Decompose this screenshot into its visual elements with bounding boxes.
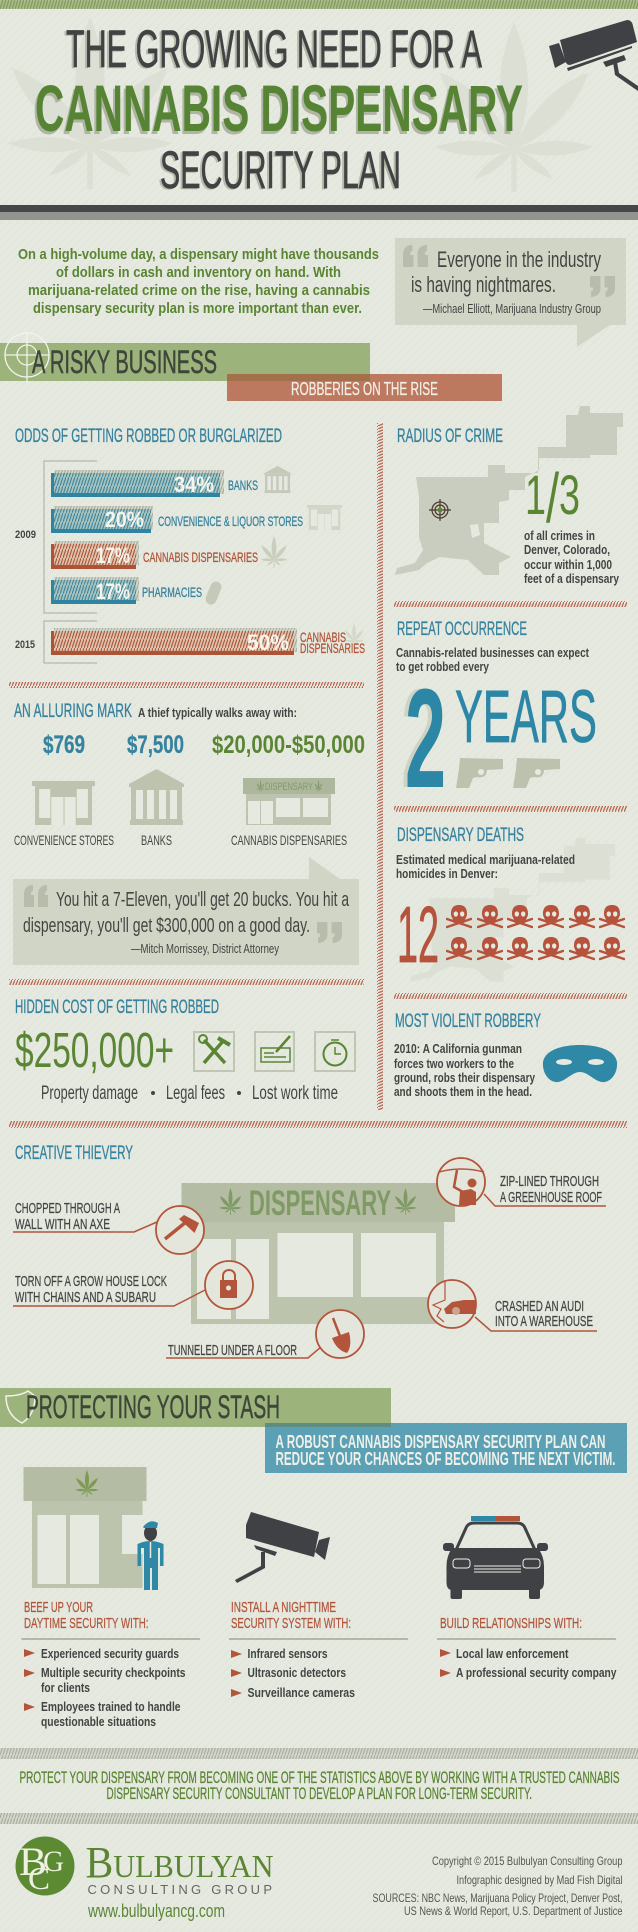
icon: handgun two: [513, 758, 560, 788]
icon: tools: [194, 1032, 234, 1071]
bullet list: [440, 1646, 617, 1680]
icon: security camera: [549, 20, 638, 91]
heading: deaths: DISPENSARY DEATHS: [397, 825, 524, 846]
label: cannabis dispensaries 2015: DISPENSARIES: [300, 640, 365, 656]
icon: pill: [204, 580, 223, 606]
stat: one third: 3: [559, 463, 580, 526]
quote callout: Michael Elliott: [395, 238, 626, 347]
stat: one third: 1: [525, 463, 556, 526]
bar: convenience 20%: 20%: [105, 507, 144, 532]
description: homicides in Denver:: [396, 866, 498, 881]
panel: dispensary deaths: 12: [397, 890, 439, 979]
quote callout: Michael Elliott: is having nightmares.: [411, 272, 556, 297]
panel: nighttime security: [229, 1512, 408, 1700]
top green stripe band: [0, 0, 638, 9]
panel: odds of getting robbed bar chart: [15, 426, 365, 663]
intro text block: On a high-volume day, a dispensary might have thousands: [18, 246, 379, 263]
amount: dispensaries: $20,000-$50,000: [212, 731, 365, 759]
dispensary building illustration: [182, 1183, 455, 1324]
description: and shoots them in the head.: [394, 1084, 532, 1099]
icon: check: [255, 1032, 294, 1071]
description: [396, 645, 590, 674]
label: legal fees: Legal fees: [166, 1083, 225, 1104]
quote callout: Mitch Morrissey: dispensary, you'll get $300,000 on a good day.: [23, 915, 310, 937]
bullet list: Infrared sensors: [248, 1646, 328, 1661]
icon: convenience store: [32, 781, 95, 825]
icon: left background cannabis leaf: [3, 17, 177, 189]
icon: storefront with guard: [24, 1467, 164, 1590]
description: 2010: A California gunman: [394, 1041, 522, 1056]
bullet list: Local law enforcement: [456, 1646, 569, 1661]
bar: banks 34%: [51, 470, 224, 497]
logo mark: G: [43, 1845, 64, 1878]
logo mark: [16, 1836, 74, 1896]
icon: opening quote: [24, 885, 48, 907]
heading: daytime: BEEF UP YOUR: [24, 1599, 93, 1616]
panel: hidden cost: [15, 997, 355, 1104]
bar: pharmacies 17%: 17%: [96, 579, 130, 604]
logo: Bulbulyan Consulting Group: [16, 1836, 274, 1921]
stat description: occur within 1,000: [524, 557, 612, 572]
bullet list: Ultrasonic detectors: [248, 1665, 346, 1680]
label: cannabis dispensaries: CANNABIS DISPENSARIES: [143, 549, 258, 565]
company subtitle: CONSULTING GROUP: [88, 1882, 272, 1897]
bullet list: [24, 1646, 186, 1729]
bar: pharmacies 17%: [51, 577, 139, 604]
icon: security camera: [235, 1512, 330, 1583]
bullet list: Experienced security guards: [41, 1646, 179, 1661]
amount: banks: $7,500: [127, 731, 184, 759]
company name: BULBULYAN: [86, 1838, 274, 1887]
amount: convenience: $769: [43, 731, 85, 759]
big number 2: 2: [405, 659, 446, 817]
quote callout: Mitch Morrissey: [13, 857, 359, 965]
icon: opening quote: [403, 245, 428, 267]
label: convenience: CONVENIENCE & LIQUOR STORES: [158, 513, 303, 529]
callout: lock: WITH CHAINS AND A SUBARU: [15, 1289, 156, 1306]
website: www.bulbulyancg.com: [87, 1901, 225, 1921]
year label 2009: 2009: [15, 529, 36, 541]
header panel: [3, 17, 638, 200]
icon: bank: [264, 466, 291, 493]
description: forces two workers to the: [394, 1056, 514, 1071]
callout: car crash: [428, 1280, 597, 1331]
banner: robberies on the rise: ROBBERIES ON THE RISE: [291, 379, 438, 399]
panel: most violent robbery: [394, 1011, 617, 1099]
icon: handgun one: [456, 758, 503, 788]
stat: one third: /: [546, 459, 559, 537]
section heading: a risky business: [0, 331, 370, 383]
faded map: [410, 838, 615, 982]
map of Denver: [395, 406, 623, 575]
callout: shovel: TUNNELED UNDER A FLOOR: [168, 1342, 297, 1359]
bullet list: questionable situations: [41, 1714, 156, 1729]
callout: shovel: [166, 1310, 364, 1359]
intro text block: dispensary security plan is more important than ever.: [33, 300, 362, 317]
skull icons row two: [447, 937, 624, 959]
callout: axe: WALL WITH AN AXE: [15, 1216, 110, 1233]
icon: dispensary storefront: [243, 778, 335, 825]
subheading: A thief typically walks away with:: [138, 705, 297, 720]
callout: car crash: CRASHED AN AUDI: [495, 1298, 584, 1315]
stat: 250000: $250,000+: [15, 1024, 174, 1078]
bullet list: Surveillance cameras: [248, 1685, 355, 1700]
icon: convenience store: [307, 505, 342, 530]
bar: cannabis 17%: [51, 541, 139, 569]
icon: closing quote: [317, 922, 342, 943]
bullet list: for clients: [41, 1680, 90, 1695]
label: cannabis dispensaries: CANNABIS DISPENSARIES: [231, 832, 347, 848]
logo mark: C: [28, 1860, 50, 1896]
heading text: PROTECTING YOUR STASH: [26, 1389, 280, 1425]
heading: repeat occurrence: REPEAT OCCURRENCE: [397, 619, 527, 640]
callout: zip line: [437, 1158, 606, 1206]
icon: stopwatch: [315, 1032, 355, 1071]
label: cannabis dispensaries 2015: CANNABIS: [300, 629, 346, 645]
icon: leaf: [260, 536, 288, 568]
stat description: Denver, Colorado,: [524, 542, 610, 557]
panel: nighttime security: SECURITY SYSTEM WITH:: [231, 1615, 351, 1632]
panel: daytime security: [22, 1467, 200, 1729]
label: property damage: Property damage: [41, 1083, 138, 1104]
description: to get robbed every: [396, 659, 490, 674]
bar: cannabis 17%: 17%: [96, 543, 130, 568]
panel: daytime security: DAYTIME SECURITY WITH:: [24, 1615, 148, 1632]
bar: cannabis 50%: [51, 628, 297, 655]
icon: target: [429, 499, 451, 521]
bullet list: Multiple security checkpoints: [41, 1665, 186, 1680]
description: Estimated medical marijuana-related: [396, 852, 575, 867]
intro text block: [18, 246, 379, 317]
callout: lock: TORN OFF A GROW HOUSE LOCK: [15, 1273, 167, 1290]
panel: an alluring mark: [14, 701, 365, 848]
description: ground, robs their dispensary: [394, 1070, 536, 1085]
footer credits and sources: [372, 1854, 623, 1918]
section heading: protecting your stash: [0, 1388, 391, 1427]
panel: creative thievery: [13, 1143, 606, 1359]
dispensary building illustration: DISPENSARY: [249, 1184, 391, 1223]
heading: alluring mark: AN ALLURING MARK: [14, 701, 132, 722]
description: [394, 1041, 536, 1099]
header divider bar: [0, 205, 638, 220]
label: banks: BANKS: [141, 832, 172, 848]
panel: radius of crime: [395, 406, 623, 586]
label: convenience stores: CONVENIENCE STORES: [14, 832, 114, 848]
panel: dispensary deaths: [396, 825, 624, 982]
callout: axe: CHOPPED THROUGH A: [15, 1200, 120, 1217]
logo mark: B: [19, 1839, 47, 1884]
description: [396, 852, 575, 881]
icon: bank: [129, 769, 184, 825]
label: lost work time: Lost work time: [252, 1083, 338, 1104]
callout: axe: [13, 1200, 204, 1254]
icon: closing quote: [590, 276, 615, 297]
closing call to action: [20, 1768, 620, 1803]
panel: build relationships: [437, 1516, 617, 1680]
icon: right background cannabis leaf: [431, 22, 597, 192]
label: banks: BANKS: [228, 477, 258, 493]
icon: faded leaf: [344, 623, 364, 647]
quote text: You hit a 7-Eleven, you'll get 20 bucks. You hit a: [56, 889, 350, 911]
title line three: SECURITY PLAN: [160, 141, 401, 200]
intro text block: of dollars in cash and inventory on hand. With: [56, 264, 341, 281]
heading text: A RISKY BUSINESS: [32, 344, 217, 380]
bar: banks 34%: 34%: [174, 472, 214, 497]
quote attribution: —Mitch Morrissey, District Attorney: [131, 941, 279, 956]
icon: bandit mask: [543, 1045, 617, 1082]
year label 2015: 2015: [15, 639, 35, 651]
bullet list: [231, 1646, 355, 1700]
icon: crosshair: [5, 331, 49, 383]
banner: robust plan: [265, 1423, 627, 1473]
heading: creative thievery: CREATIVE THIEVERY: [15, 1143, 133, 1164]
heading: nighttime: INSTALL A NIGHTTIME: [231, 1599, 336, 1616]
panel: repeat occurrence: [396, 619, 597, 817]
icon: dispensary storefront: DISPENSARY: [265, 781, 313, 793]
callout: lock: [13, 1261, 253, 1309]
heading: radius of crime: RADIUS OF CRIME: [397, 426, 503, 447]
intro text block: marijuana-related crime on the rise, having a cannabis: [28, 282, 370, 299]
icon: shield: [6, 1391, 35, 1423]
label: cannabis dispensaries 2015: [300, 629, 365, 656]
heading: odds: ODDS OF GETTING ROBBED OR BURGLARIZED: [15, 426, 282, 447]
stat description: [524, 528, 620, 586]
bullet list: Employees trained to handle: [41, 1699, 180, 1714]
stat description: of all crimes in: [524, 528, 595, 543]
bar: cannabis 50%: 50%: [247, 630, 289, 655]
banner: robberies on the rise: [227, 374, 502, 401]
bar: convenience 20%: [51, 506, 153, 533]
heading: most violent: MOST VIOLENT ROBBERY: [395, 1011, 541, 1032]
skull icons row one: [447, 905, 624, 927]
label: pharmacies: PHARMACIES: [142, 584, 202, 600]
icon: police car: [443, 1516, 548, 1599]
heading: hidden cost: HIDDEN COST OF GETTING ROBBED: [15, 997, 219, 1018]
